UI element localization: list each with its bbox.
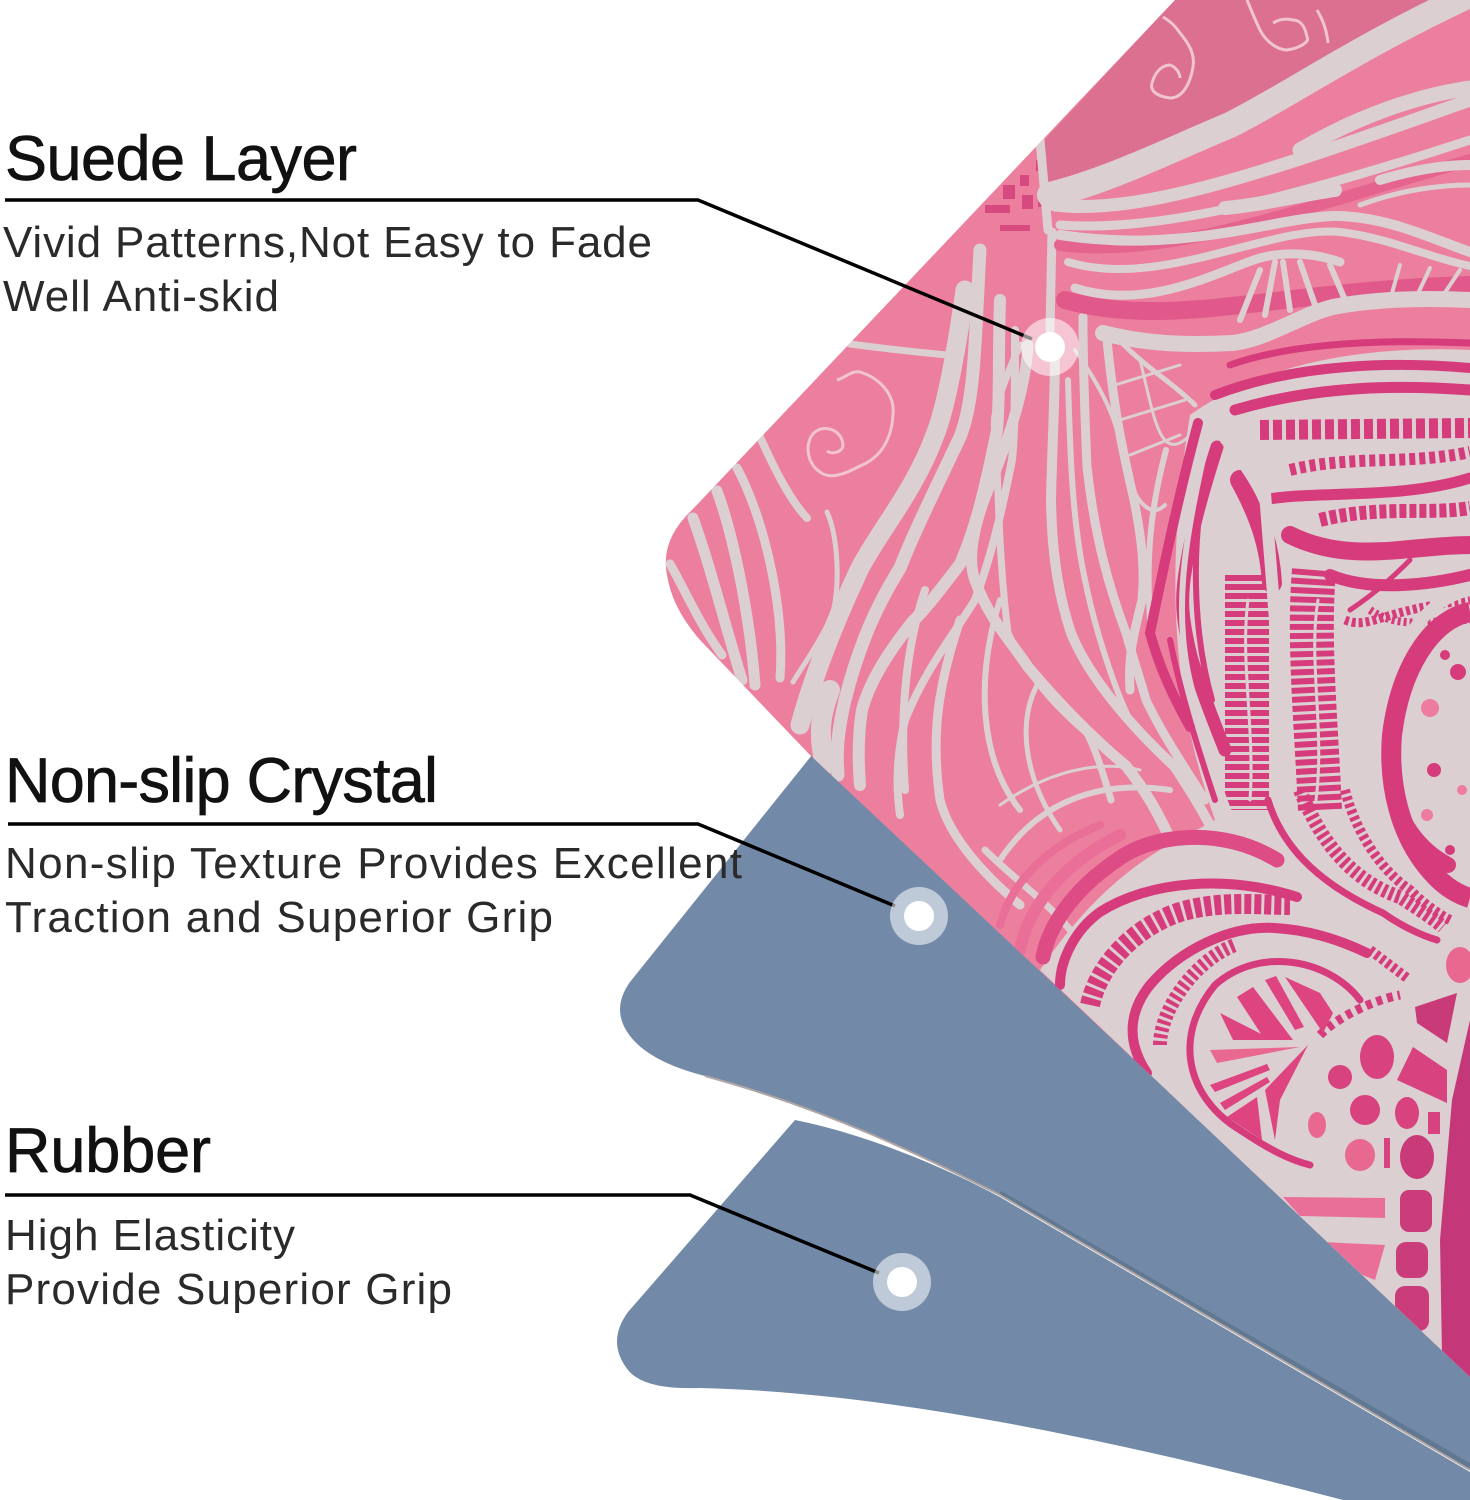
label: Non-slip Crystal: [5, 746, 948, 945]
paisley motif: [1377, 590, 1470, 920]
heading: Rubber: Rubber: [5, 1116, 211, 1186]
middle strands: [903, 317, 1215, 950]
description: Suede Layer: [3, 218, 652, 321]
heading: Non-slip Crystal: Non-slip Crystal: [5, 746, 438, 816]
marker dot: Suede Layer: [1021, 318, 1079, 376]
upper band pattern: [1050, 0, 1470, 344]
leader line: Rubber: [5, 1195, 879, 1273]
suede layer with pink pattern: [640, 0, 1470, 1400]
non-slip crystal layer: [620, 755, 1470, 1470]
spiral curl motif: [808, 0, 1328, 476]
hatched lower arcs: [1090, 790, 1450, 1045]
grey veins over petal: [1182, 440, 1319, 820]
leader line: Suede Layer: [5, 200, 1032, 339]
description: Rubber: [5, 1211, 452, 1314]
dark stripes in the petal: [1150, 342, 1470, 800]
marker dot: Non-slip Crystal: [890, 887, 948, 945]
deep magenta right band: [1440, 1020, 1470, 1395]
lower arcs: [1043, 785, 1448, 1165]
description: Non-slip Crystal: [5, 839, 742, 942]
description: Rubber: Provide Superior Grip: [5, 1265, 452, 1314]
cross-hatch patch near left edge: [985, 160, 1046, 231]
central grey petal field: [1040, 349, 1470, 1400]
dusty pink upper field: [1044, 0, 1428, 182]
description: Suede Layer: Vivid Patterns,Not Easy to Fade: [3, 218, 652, 267]
description: Suede Layer: Well Anti-skid: [3, 272, 279, 321]
dotted spots: [1283, 947, 1470, 1331]
description: Rubber: High Elasticity: [5, 1211, 295, 1260]
description: Non-slip Crystal: Traction and Superior Grip: [5, 893, 553, 942]
marker dot: Rubber: [873, 1253, 931, 1311]
fan motif: [1210, 976, 1333, 1140]
rubber layer: [617, 1120, 1470, 1500]
label: Suede Layer: [3, 124, 1079, 376]
hatched dark blocks in the petal: [1247, 428, 1470, 810]
leader line: Non-slip Crystal: [8, 824, 895, 906]
description: Non-slip Crystal: Non-slip Texture Provides Excellent: [5, 839, 742, 888]
left corner stripes: [670, 250, 1015, 815]
label: Rubber: [5, 1116, 931, 1314]
soft pink strands at the lower left of the petal: [1000, 825, 1120, 950]
heading: Suede Layer: Suede Layer: [5, 124, 357, 194]
